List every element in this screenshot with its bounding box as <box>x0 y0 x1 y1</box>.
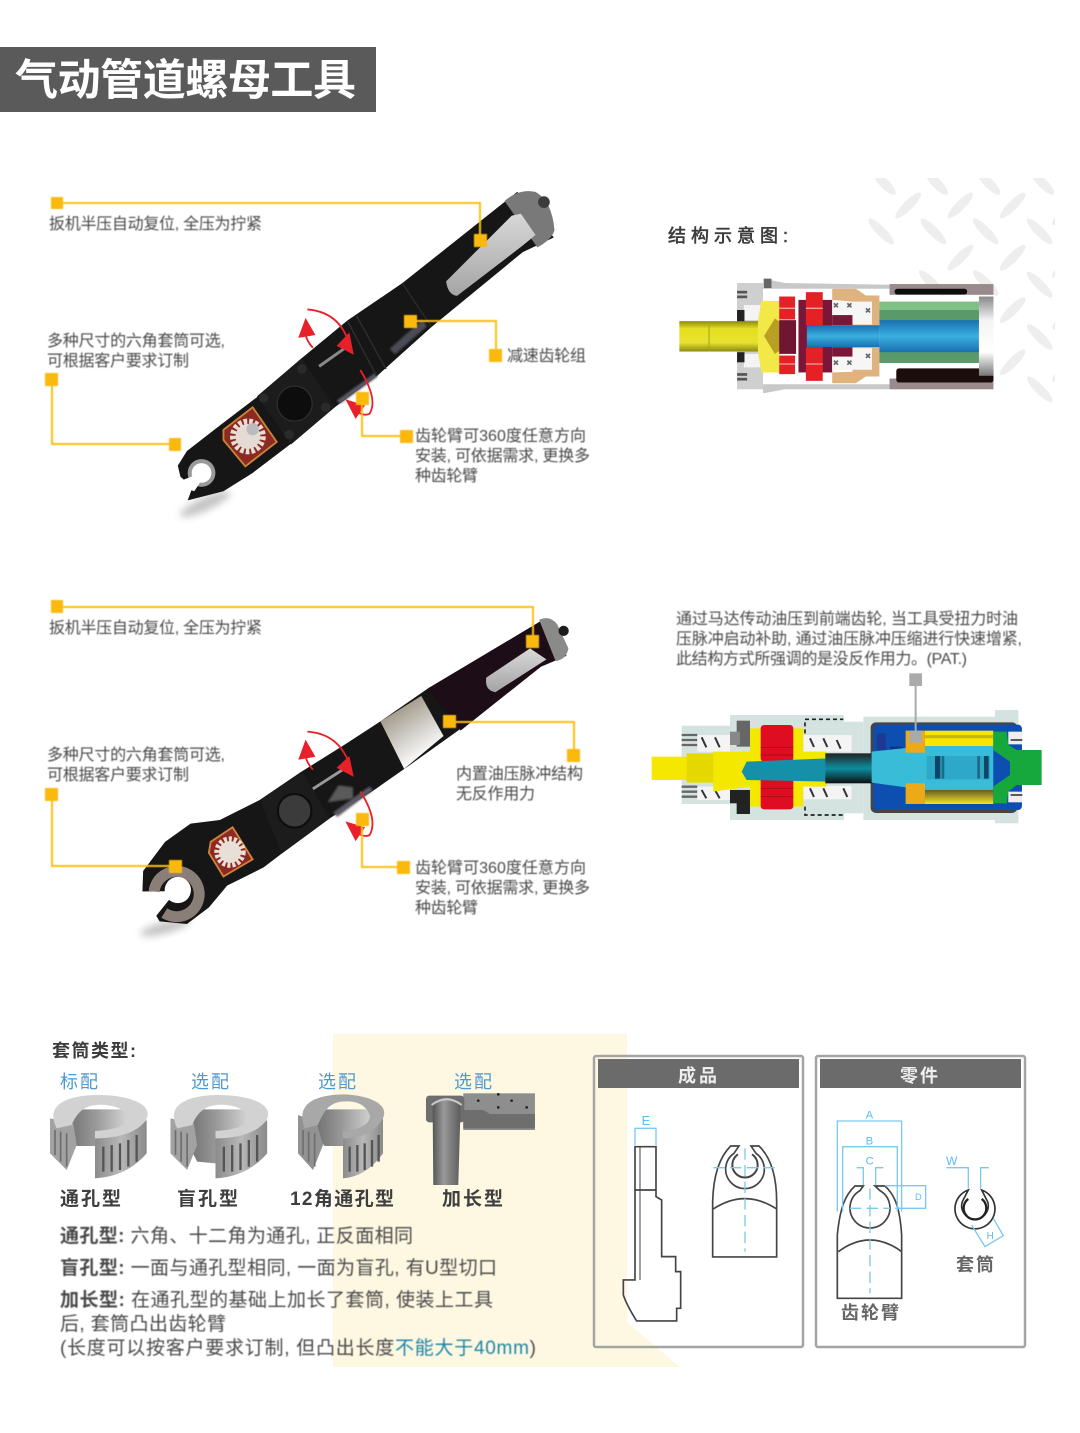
callout: oil pulse: 无反作用力 <box>456 785 535 803</box>
callout: gear arm 1: 齿轮臂可360度任意方向 <box>415 426 586 445</box>
structure diagram 1 <box>679 279 993 393</box>
socket description text: (长度可以按客户要求订制, 但凸出长度不能大于40mm) <box>60 1337 536 1359</box>
socket 3 <box>298 1094 384 1178</box>
panel header: finished product: 成品 <box>678 1065 717 1086</box>
drawing: socket: W <box>946 1154 958 1168</box>
description text <box>676 610 1022 668</box>
drawing: side and front views: E <box>642 1114 650 1128</box>
panel header: finished product <box>598 1059 799 1088</box>
drawing: gear arm: D <box>915 1192 922 1202</box>
callout: gear arm 2 <box>356 813 590 917</box>
callout: gear arm 1: 安装, 可依据需求, 更换多 <box>415 447 590 465</box>
description text: 压脉冲启动补助, 通过油压脉冲压缩进行快速增紧, <box>676 630 1022 648</box>
title bar: 气动管道螺母工具 <box>15 57 356 105</box>
socket 2 <box>170 1095 268 1178</box>
cream background panel <box>333 1034 680 1367</box>
drawing: gear arm: C <box>866 1155 874 1167</box>
heading: socket types: 套筒类型: <box>52 1040 136 1061</box>
label: socket: 套筒 <box>956 1254 994 1275</box>
rotation arrows <box>298 309 372 419</box>
structure diagram 2 <box>652 673 1042 823</box>
socket 1 <box>50 1095 148 1178</box>
callout: socket sizes 2 <box>45 746 225 873</box>
callout: trigger 2 <box>49 600 539 648</box>
panel header: parts <box>820 1059 1021 1088</box>
drawing: socket: H <box>987 1231 994 1242</box>
socket name: blind-hole: 盲孔型 <box>177 1187 238 1210</box>
socket description text: 通孔型: 六角、十二角为通孔, 正反面相同 <box>60 1225 413 1247</box>
socket name: 12-point: 12角通孔型 <box>290 1187 394 1210</box>
label: optional 2: 选配 <box>318 1072 356 1092</box>
drawing: socket <box>946 1154 1003 1247</box>
callout: oil pulse: 内置油压脉冲结构 <box>456 765 583 783</box>
rotation arrows <box>298 732 372 841</box>
callout: socket sizes 1: 可根据客户要求订制 <box>47 352 189 370</box>
label: standard: 标配 <box>60 1072 98 1092</box>
label: gear arm: 齿轮臂 <box>841 1302 899 1323</box>
label: optional 3: 选配 <box>454 1072 492 1092</box>
description text: 通过马达传动油压到前端齿轮, 当工具受扭力时油 <box>676 610 1018 628</box>
callout: reduction gears <box>404 315 586 365</box>
callout: trigger 2: 扳机半压自动复位, 全压为拧紧 <box>49 618 262 637</box>
callout: gear arm 1: 种齿轮臂 <box>415 467 478 485</box>
drawing: gear arm: A <box>866 1109 874 1121</box>
label: optional 1: 选配 <box>191 1072 229 1092</box>
callout: socket sizes 2: 多种尺寸的六角套筒可选, <box>47 746 225 764</box>
callout: gear arm 2: 齿轮臂可360度任意方向 <box>415 858 586 877</box>
title bar <box>0 47 376 112</box>
background leaf pattern <box>865 169 1080 437</box>
panel header: parts: 零件 <box>900 1066 938 1086</box>
socket description text <box>60 1225 536 1359</box>
drawing: gear arm <box>837 1109 926 1298</box>
callout: reduction gears: 减速齿轮组 <box>507 347 586 365</box>
callout: trigger 1 <box>49 197 487 247</box>
callout: trigger 1: 扳机半压自动复位, 全压为拧紧 <box>49 214 262 233</box>
callout: socket sizes 1 <box>45 332 225 451</box>
socket name: extended: 加长型 <box>442 1188 503 1210</box>
callout: socket sizes 1: 多种尺寸的六角套筒可选, <box>47 332 225 350</box>
description text: 此结构方式所强调的是没反作用力。(PAT.) <box>676 650 967 668</box>
socket types row <box>50 1072 535 1210</box>
tool photo 2 <box>138 618 569 940</box>
socket description text: 后, 套筒凸出齿轮臂 <box>60 1313 226 1335</box>
socket 4 extended <box>426 1093 535 1185</box>
socket description text: 盲孔型: 一面与通孔型相同, 一面为盲孔, 有U型切口 <box>60 1256 497 1279</box>
drawing: gear arm: B <box>866 1135 873 1147</box>
heading: structure diagram: 结构示意图: <box>668 226 788 246</box>
callout: gear arm 1 <box>356 392 590 485</box>
socket description text: 加长型: 在通孔型的基础上加长了套筒, 使装上工具 <box>60 1289 493 1311</box>
tool photo 1 <box>173 191 555 521</box>
callout: oil pulse <box>443 715 583 803</box>
callout: gear arm 2: 种齿轮臂 <box>415 899 478 917</box>
callout: gear arm 2: 安装, 可依据需求, 更换多 <box>415 879 590 897</box>
drawing: side and front views <box>623 1114 777 1321</box>
socket name: through-hole: 通孔型 <box>60 1188 121 1210</box>
panel: finished product <box>594 1056 803 1347</box>
callout: socket sizes 2: 可根据客户要求订制 <box>47 766 189 784</box>
panel: parts <box>816 1056 1025 1347</box>
